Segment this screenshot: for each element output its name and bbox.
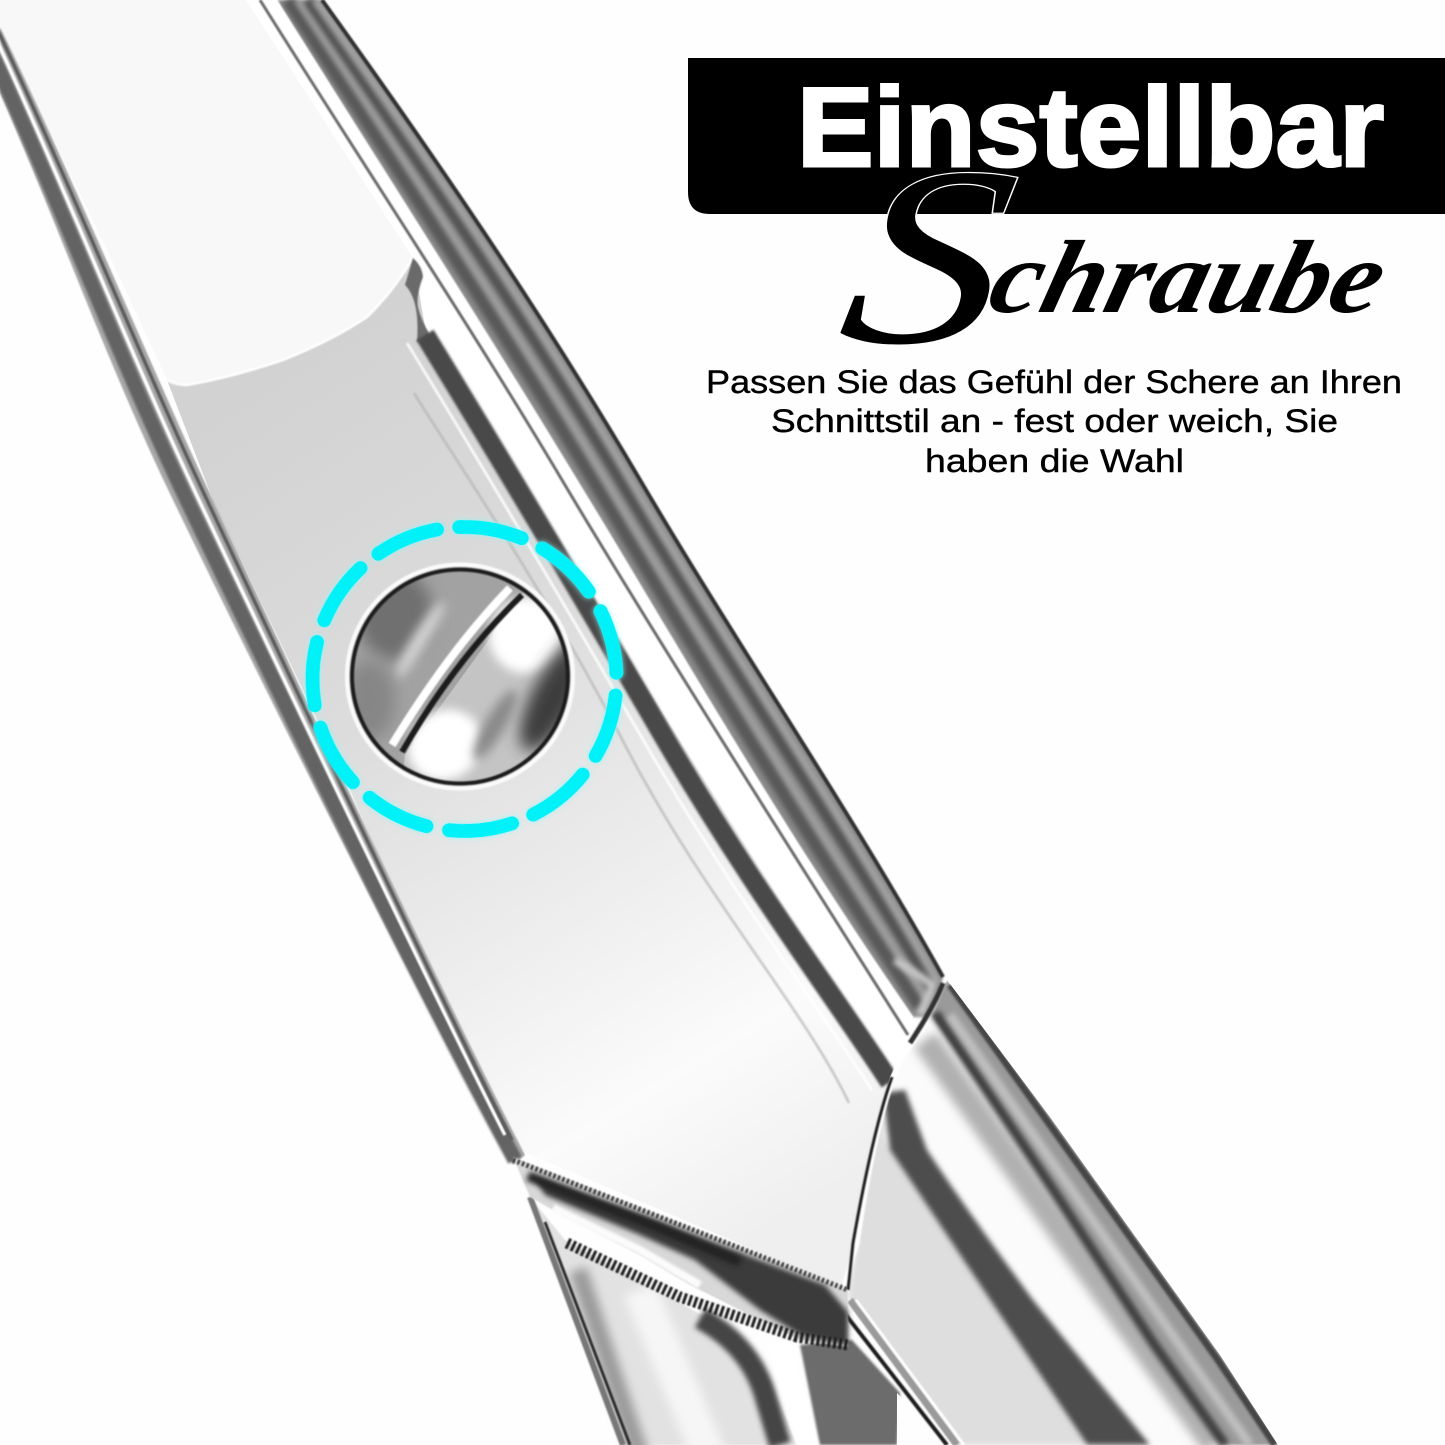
flat polished blade section [0,0,413,385]
screw head [353,571,567,782]
rim fill [932,980,1278,1445]
heel band [513,1157,848,1347]
white strip beside the spine [245,0,913,1075]
spine outer edge [322,0,943,977]
junction line highlight [844,1021,927,1287]
spine tonal stripes [288,0,938,1007]
junction line [910,983,943,1043]
heel light section [530,1197,797,1445]
lower blade heel [513,1157,964,1445]
white shaft highlight [778,1342,808,1445]
heading: Einstellbar: Einstellbar [797,65,1384,190]
lower brushed handle panel [848,1100,1087,1445]
heel dark wedge [535,1178,848,1345]
lower junction line [848,1077,892,1290]
heading bar [688,58,1445,214]
handle section [844,980,1278,1445]
grey shade under rim [925,1040,1215,1445]
spine end highlight [895,960,933,1015]
outer left lines of heel [530,1197,630,1445]
upper spine of the blade [277,0,943,1017]
handle body [848,980,1278,1445]
dark band along the blade face [407,335,890,1103]
curved dark shaft [700,1318,780,1445]
highlight line on blade curve [167,258,413,385]
strip fill [245,0,913,1075]
outer rim of handle [932,980,1278,1445]
band dark line [0,22,512,1140]
heel dark line [528,1176,740,1262]
script heading: Schraube: S [825,115,1033,398]
spine base [277,0,943,1017]
band highlight [0,30,505,1135]
body text: haben die Wahl [925,443,1184,479]
blade face [167,258,893,1290]
white band under wedge [553,1208,700,1285]
handle shading [848,980,1278,1445]
grey shaft [800,1340,900,1445]
body text [706,364,1402,479]
rim highlight [950,1015,1250,1445]
second serration marks [567,1243,848,1345]
grey line [414,393,849,1103]
band shadow [0,50,515,1160]
notch shadow [405,258,430,342]
adjustment screw [344,562,576,791]
rim inner dark line [935,1013,1225,1445]
dark handle band [883,1090,1150,1445]
body text: Passen Sie das Gefühl der Schere an Ihren [706,364,1402,400]
screw rim highlight [347,564,573,788]
screw outline [352,570,568,784]
upper serration marks [513,1160,848,1290]
script heading: Schraube [825,115,1398,398]
lower edge lines [842,1300,964,1445]
white gap triangle [897,1393,947,1445]
band fill [0,27,525,1165]
strip thin line [260,0,908,1035]
script heading: Schraube: chraube [979,219,1398,335]
left edge bands of the blade [0,22,525,1165]
dashed cyan highlight ring [307,522,622,836]
dark band [425,335,890,1082]
white line [407,343,872,1090]
screw slot [392,588,510,745]
body text: Schnittstil an - fest oder weich, Sie [771,403,1338,439]
heel shading stripes [578,1270,715,1445]
rim outer dark line [950,985,1275,1445]
